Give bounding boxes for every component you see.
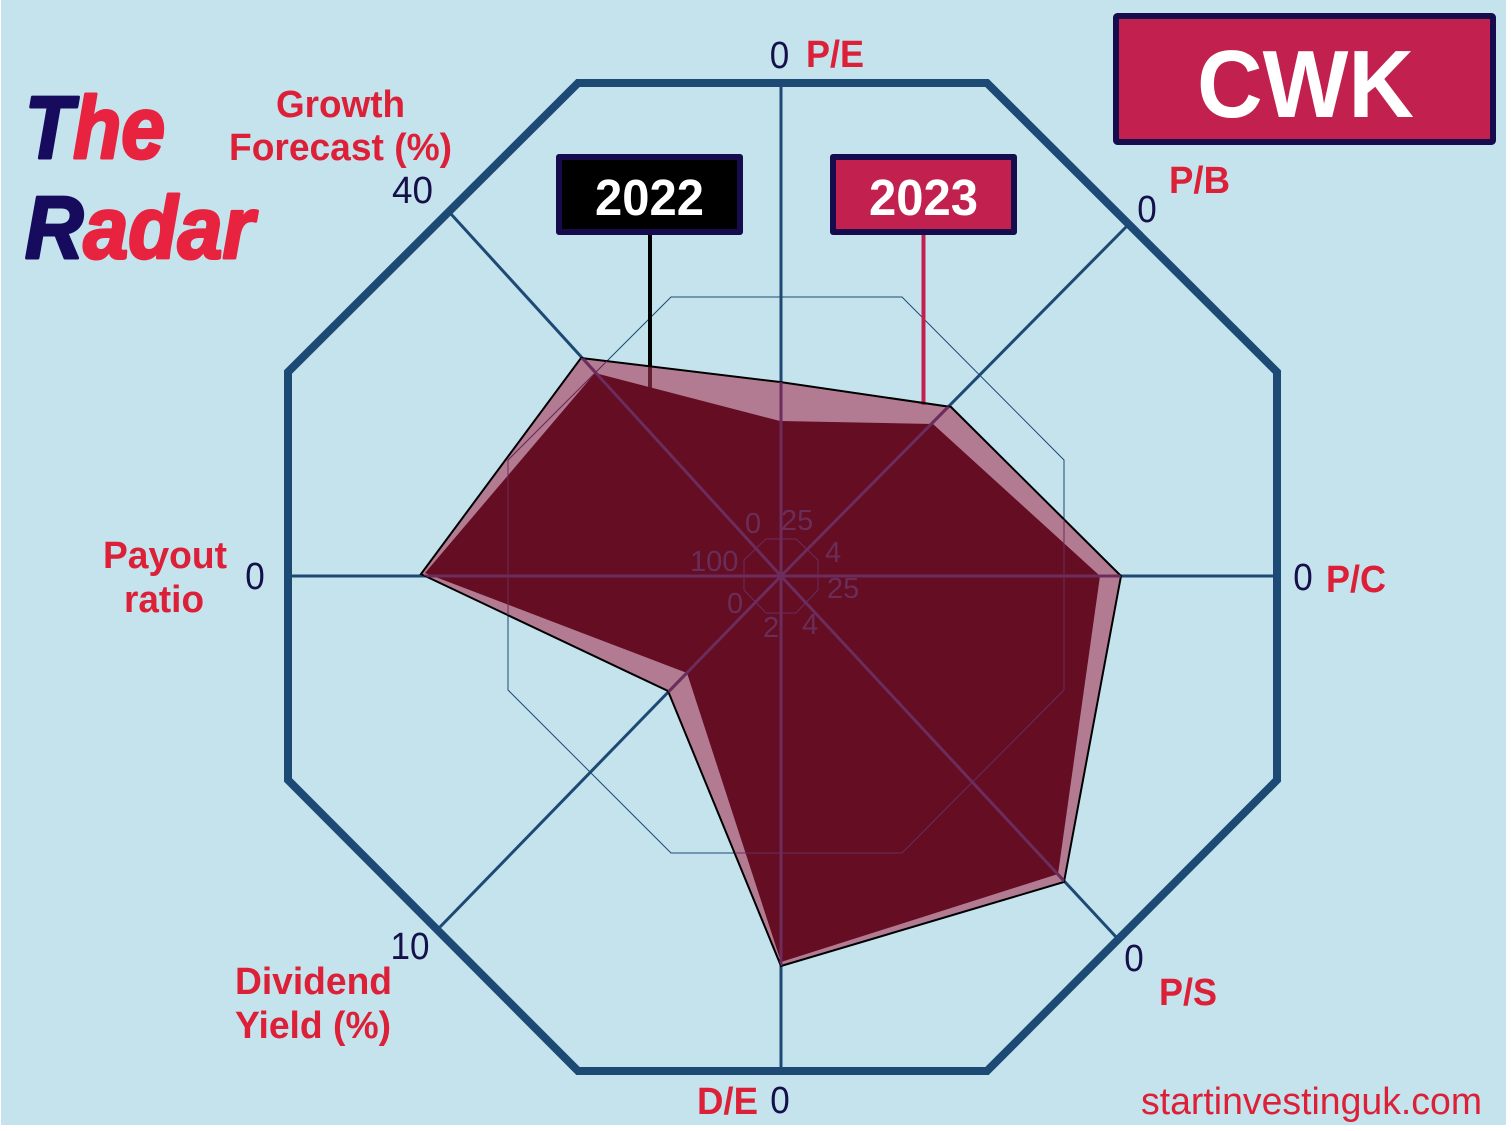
- axis label: Dividend Yield: 10: [390, 926, 430, 968]
- axis label: D/E: [697, 1080, 790, 1123]
- axis label: Growth Forecast: 40: [392, 170, 433, 212]
- axis label: Dividend Yield: Dividend: [235, 961, 392, 1003]
- ticker box: CWK: [1116, 16, 1493, 142]
- axis label: Dividend Yield: Yield (%): [235, 1005, 391, 1047]
- axis label: P/C: 0: [1293, 557, 1313, 599]
- axis label: Payout ratio: Payout: [103, 535, 227, 577]
- inner scale labels: 0: [727, 588, 743, 620]
- axis label: P/S: P/S: [1159, 972, 1217, 1014]
- website credit: startinvestinguk.com: [1141, 1081, 1482, 1123]
- axis label: Payout ratio: [103, 535, 265, 621]
- legend: 2022: 2022: [595, 169, 704, 226]
- 2022 leader line: [648, 235, 652, 390]
- legend: 2022: [559, 157, 740, 232]
- axis label: P/B: [1137, 160, 1230, 231]
- radar axes: [288, 83, 1277, 1071]
- axis label: Dividend Yield: [235, 926, 430, 1047]
- axis label: Growth Forecast: [229, 84, 452, 212]
- ticker box: CWK: CWK: [1197, 31, 1414, 138]
- outer octagon frame: [288, 83, 1277, 1071]
- axis label: D/E: 0: [770, 1080, 790, 1122]
- axis label: Payout ratio: 0: [245, 556, 265, 598]
- axis label: P/E: [770, 34, 864, 77]
- title: [25, 78, 258, 277]
- 2023 data polygon: [421, 358, 1121, 966]
- legend: 2023: 2023: [869, 169, 978, 226]
- axis label: P/C: [1293, 557, 1386, 601]
- inner scale labels: 4: [825, 537, 841, 569]
- inner scale labels: 0: [745, 508, 761, 540]
- inner octagon gridline: [744, 539, 818, 613]
- axis label: P/S: 0: [1124, 938, 1144, 980]
- title: The: [25, 78, 165, 177]
- 2023 leader line: [922, 235, 926, 405]
- axis label: Growth Forecast: Growth: [276, 84, 405, 126]
- inner scale labels: 100: [690, 546, 738, 578]
- axis label: P/B: P/B: [1169, 160, 1230, 202]
- radar chart: [288, 83, 1277, 1071]
- inner scale labels: [690, 505, 859, 644]
- axis label: P/E: 0: [770, 35, 789, 77]
- inner scale labels: 4: [802, 609, 818, 641]
- axis label: P/B: 0: [1137, 189, 1157, 231]
- axis label: P/S: [1124, 938, 1217, 1014]
- inner scale labels: 2: [763, 612, 779, 644]
- axis label: Payout ratio: ratio: [124, 579, 204, 621]
- legend: 2023: [833, 157, 1014, 232]
- axes tinted over data: [422, 358, 1121, 966]
- inner scale labels: 25: [827, 573, 859, 605]
- axis label: D/E: D/E: [697, 1081, 758, 1123]
- 2022 data polygon: [425, 373, 1100, 962]
- axis label: Growth Forecast: Forecast (%): [229, 127, 452, 169]
- inner scale labels: 25: [781, 505, 813, 537]
- title: Radar: [25, 178, 258, 277]
- axis label: P/E: P/E: [806, 34, 864, 76]
- mid octagon gridline: [508, 297, 1064, 853]
- axis label: P/C: P/C: [1326, 559, 1386, 601]
